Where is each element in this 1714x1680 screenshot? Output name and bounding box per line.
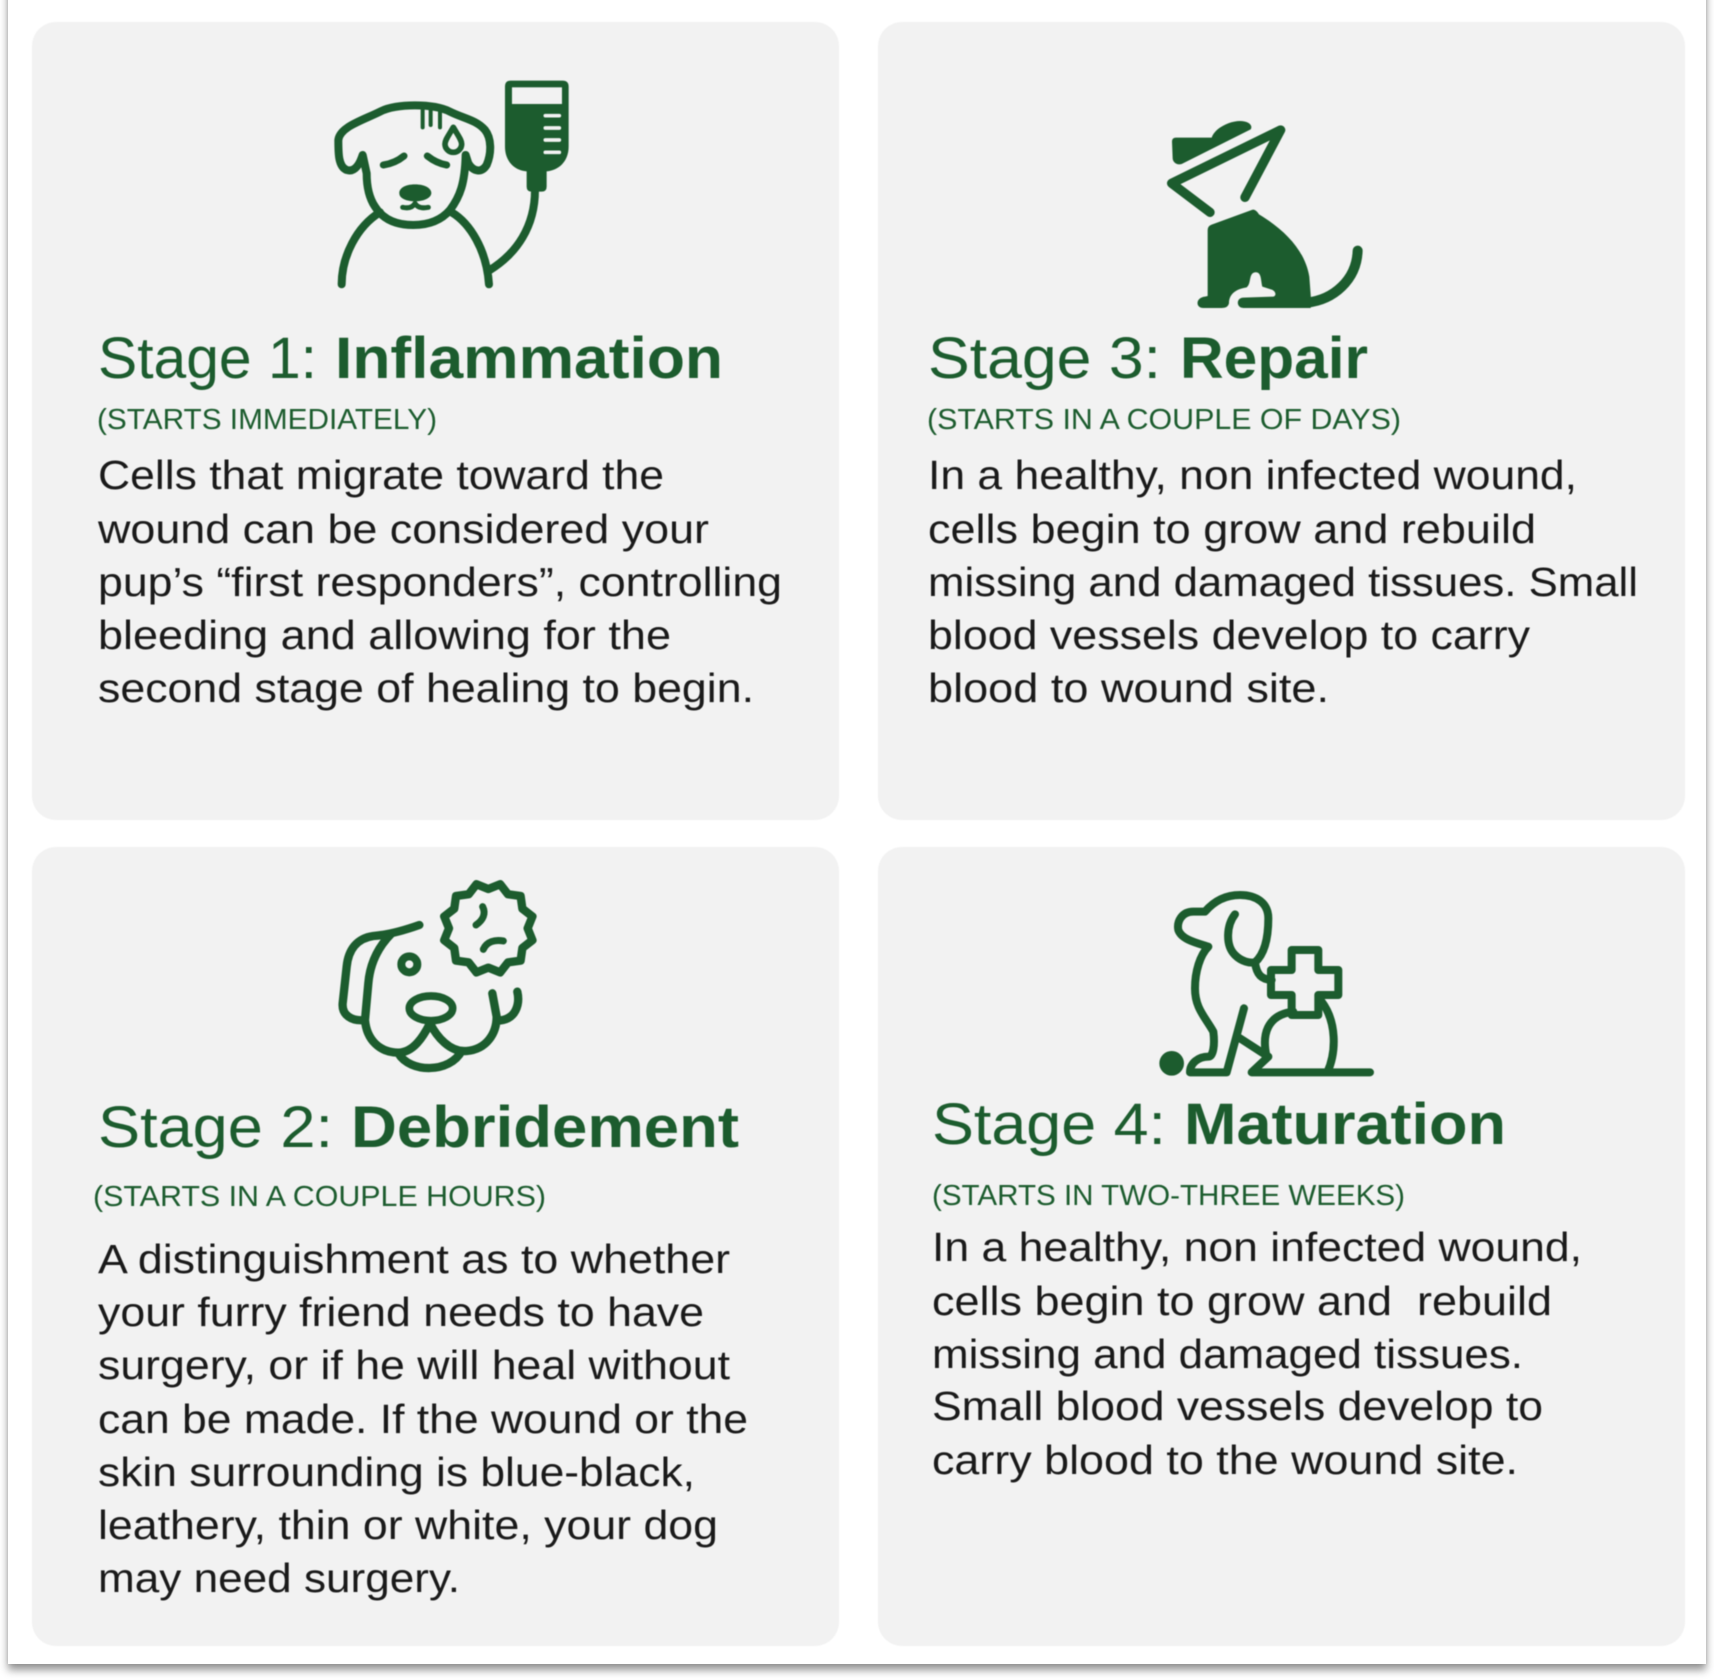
panel: stage 3 repair [878,22,1685,820]
text block: stage 3 description: blood vessels develop to carry [928,612,1531,658]
text block: stage 1 description: wound can be considered your [97,506,709,552]
text block: stage 2 description [98,1236,748,1601]
icon: seated dog with medical cross [1159,895,1370,1076]
subheading: stage 3 timing: (STARTS IN A COUPLE OF DAYS) [927,404,1401,436]
subheading: stage 1 timing: (STARTS IMMEDIATELY) [97,404,437,436]
panel: stage 1 inflammation [32,22,839,820]
heading: stage 4: Stage 4: [932,1092,1166,1157]
text block: stage 4 description: Small blood vessels develop to [932,1383,1543,1429]
heading: stage 4: Maturation [1184,1092,1506,1157]
text block: stage 2 description: surgery, or if he will heal without [98,1342,731,1388]
text block: stage 1 description: Cells that migrate toward the [98,452,664,498]
heading: stage 1: Stage 1: [98,326,317,391]
text block: stage 2 description: leathery, thin or white, your dog [98,1502,718,1548]
text block: stage 4 description: carry blood to the wound site. [932,1437,1518,1483]
subheading: stage 4 timing: (STARTS IN TWO-THREE WEEKS) [932,1180,1405,1212]
heading: stage 4 [932,1092,1506,1157]
text block: stage 1 description: bleeding and allowing for the [98,612,671,658]
heading: stage 3: Stage 3: [928,326,1161,391]
text block: stage 1 description [97,452,782,711]
heading: stage 3: Repair [1180,326,1368,391]
text block: stage 2 description: A distinguishment as to whether [98,1236,730,1282]
text block: stage 4 description: cells begin to grow and rebuild [932,1278,1552,1324]
icon: dog head with germ [343,884,532,1068]
text block: stage 3 description: missing and damaged tissues. Small [928,559,1638,605]
text block: stage 4 description: missing and damaged tissues. [932,1331,1523,1377]
text block: stage 1 description: pup’s “first responders”, controlling [98,559,782,605]
heading: stage 1 [98,326,723,391]
icon: sick puppy with IV bag [338,81,569,284]
heading: stage 3 [928,326,1368,391]
heading: stage 1: Inflammation [335,326,723,391]
text block: stage 3 description: In a healthy, non infected wound, [928,452,1577,498]
text block: stage 1 description: second stage of healing to begin. [98,665,754,711]
text block: stage 3 description: blood to wound site. [928,665,1329,711]
heading: stage 2: Stage 2: [98,1095,333,1160]
panel: stage 4 maturation [878,847,1685,1646]
text block: stage 3 description: cells begin to grow and rebuild [928,506,1536,552]
heading: stage 2: Debridement [351,1095,739,1160]
text block: stage 3 description [928,452,1638,711]
heading: stage 2 [98,1095,739,1160]
text block: stage 2 description: your furry friend needs to have [98,1289,704,1335]
subheading: stage 2 timing: (STARTS IN A COUPLE HOURS) [93,1181,546,1213]
icon: dog with cone collar [1172,121,1358,308]
text block: stage 4 description [932,1224,1582,1483]
text block: stage 4 description: In a healthy, non infected wound, [932,1224,1582,1270]
text block: stage 2 description: may need surgery. [98,1555,460,1601]
text block: stage 2 description: can be made. If the wound or the [98,1396,748,1442]
text block: stage 2 description: skin surrounding is blue-black, [98,1449,695,1495]
panel: stage 2 debridement [32,847,839,1646]
